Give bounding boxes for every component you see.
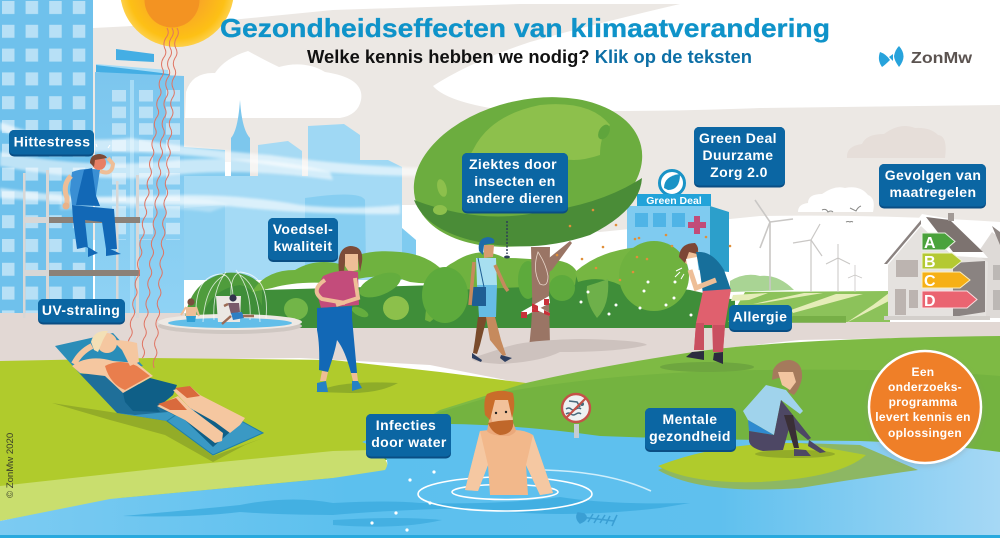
- tower second: [95, 49, 184, 314]
- sunbather: [52, 331, 263, 462]
- logo: ZonMw: ZonMw: [911, 50, 973, 67]
- warning tape: [521, 296, 550, 318]
- label: Gevolgen van maatregelen: [879, 164, 986, 208]
- energy label A: A: [924, 235, 936, 252]
- label: Gevolgen van maatregelen: Gevolgen van: [885, 167, 981, 183]
- wind turbines: [755, 200, 862, 292]
- copyright: © ZonMw 2020: [5, 433, 16, 498]
- callout: research programme: Een: [912, 365, 934, 379]
- sun: [120, 0, 234, 47]
- label: Infecties door water: Infecties: [376, 417, 436, 433]
- fountain: [158, 270, 302, 334]
- callout: research programme: levert kennis en: [875, 410, 971, 424]
- label: Infecties door water: door water: [371, 434, 447, 450]
- lawn right: [360, 336, 1000, 460]
- energy label B: B: [924, 254, 936, 271]
- swimming man: [465, 391, 553, 495]
- hospital: [627, 170, 729, 272]
- house second: [976, 226, 1000, 318]
- field stripes: [728, 275, 890, 323]
- worker: [62, 144, 121, 257]
- tree: [399, 76, 731, 364]
- sitting woman: [743, 360, 835, 458]
- tower left: [0, 0, 93, 314]
- label: Mentale gezondheid: [645, 408, 736, 452]
- woman stomach ache: [316, 246, 398, 393]
- label: Ziektes door insecten en andere dieren: [462, 153, 568, 214]
- callout: research programme: oplossingen: [888, 426, 962, 440]
- children at fountain: [181, 294, 254, 324]
- label: Infecties door water: [366, 414, 451, 458]
- label: UV-straling: [38, 299, 125, 324]
- label: Green Deal Duurzame Zorg 2.0: Green Deal: [699, 130, 777, 146]
- cloud: pale right top: [847, 126, 946, 158]
- label: Ziektes door insecten en andere dieren: Ziektes door: [469, 156, 557, 172]
- subtitle: Welke kennis hebben we nodig? Klik op de teksten: [307, 47, 752, 67]
- label: Green Deal Duurzame Zorg 2.0: Zorg 2.0: [710, 164, 768, 180]
- fish skeleton: [577, 513, 617, 526]
- no-swimming sign: [562, 394, 590, 438]
- label: Hittestress: Hittestress: [14, 134, 90, 150]
- label: Voedselkwaliteit: kwaliteit: [274, 238, 332, 254]
- label: Gevolgen van maatregelen: maatregelen: [890, 184, 976, 200]
- sneezing man: [660, 243, 754, 372]
- lawn left: [0, 358, 526, 520]
- hedge: [184, 241, 752, 328]
- house with energy labels: [884, 213, 990, 320]
- label: Green Deal Duurzame Zorg 2.0: Duurzame: [703, 147, 773, 163]
- callout: research programme: programma: [889, 395, 957, 409]
- logo: ZonMw: [879, 46, 973, 67]
- tick line: [504, 221, 510, 258]
- energy label C: C: [924, 273, 936, 290]
- cloud: white left: [185, 51, 361, 118]
- label: Allergie: Allergie: [733, 308, 787, 324]
- label: UV-straling: UV-straling: [42, 302, 120, 318]
- water ripples and bubbles: [370, 470, 651, 532]
- label: Mentale gezondheid: gezondheid: [649, 428, 731, 444]
- light shore strip: [0, 450, 387, 521]
- label: Voedselkwaliteit: [268, 218, 338, 262]
- label: Voedselkwaliteit: Voedsel-: [273, 221, 333, 237]
- title: Gezondheidseffecten van klimaatverandering: [220, 13, 830, 43]
- label: Allergie: [729, 305, 792, 332]
- walking woman: [470, 237, 512, 362]
- label: Ziektes door insecten en andere dieren: insecten en: [474, 173, 556, 189]
- haze bands: [0, 122, 420, 214]
- skyline middle: [184, 100, 422, 280]
- green deal sign: Green Deal: [646, 195, 702, 207]
- label: Ziektes door insecten en andere dieren: andere dieren: [466, 190, 564, 206]
- sun rays: [127, 28, 178, 368]
- label: Mentale gezondheid: Mentale: [663, 411, 717, 427]
- island: [658, 443, 918, 490]
- cloud: white right: [798, 187, 874, 212]
- pavement: [0, 313, 1000, 384]
- label: Hittestress: [9, 130, 94, 156]
- birds: [822, 206, 861, 222]
- label: Green Deal Duurzame Zorg 2.0: [694, 127, 785, 188]
- scaffold and worker: [23, 144, 140, 318]
- callout: research programme: [867, 351, 983, 467]
- water: [0, 424, 1000, 538]
- callout: research programme: onderzoeks-: [888, 380, 962, 394]
- energy label D: D: [924, 293, 936, 310]
